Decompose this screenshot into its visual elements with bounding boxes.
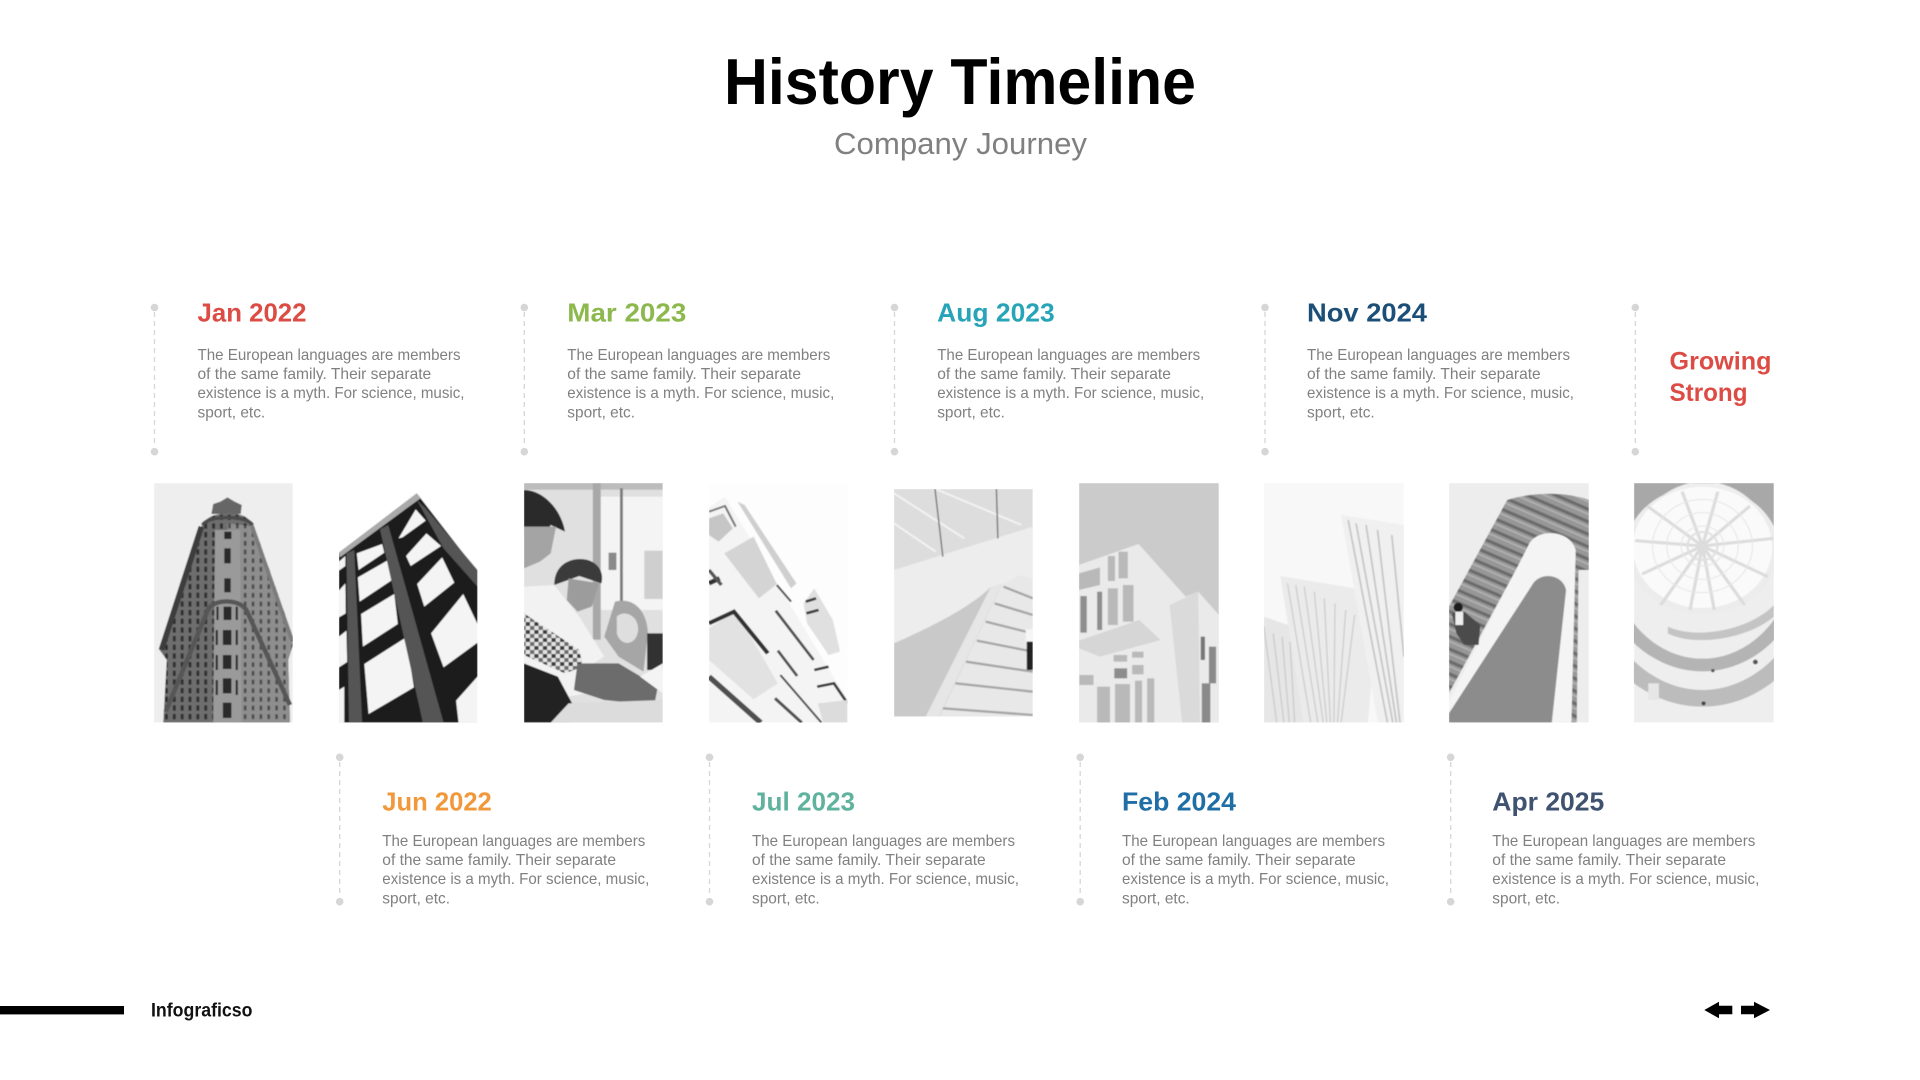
milestone: Jun 2022: sport, etc. bbox=[382, 890, 450, 907]
milestone: Feb 2024: The European languages are members bbox=[1122, 833, 1385, 850]
milestone: Jan 2022: existence is a myth. For science, music, bbox=[198, 385, 464, 402]
milestone: Nov 2024: The European languages are members bbox=[1307, 347, 1570, 364]
milestone: Aug 2023: Aug 2023 bbox=[937, 298, 1055, 328]
milestone: Aug 2023: existence is a myth. For science, music, bbox=[937, 385, 1204, 402]
footer bar bbox=[0, 1006, 124, 1014]
milestone: Jan 2022: The European languages are members bbox=[198, 347, 460, 364]
photo: spiral ramp bbox=[1449, 483, 1589, 723]
milestone: Growing Strong bbox=[1632, 304, 1772, 456]
milestone: Feb 2024: sport, etc. bbox=[1122, 890, 1190, 907]
milestone: Aug 2023: of the same family. Their separate bbox=[937, 366, 1171, 383]
milestone: Aug 2023 bbox=[891, 298, 1204, 456]
milestone: Feb 2024: of the same family. Their separate bbox=[1122, 852, 1356, 869]
milestone: Aug 2023: The European languages are members bbox=[937, 347, 1200, 364]
milestone: Apr 2025: Apr 2025 bbox=[1492, 787, 1604, 817]
milestone: Growing Strong: Growing bbox=[1670, 348, 1772, 376]
photo: white balconies bbox=[709, 483, 847, 723]
icon: previous arrow bbox=[1704, 1002, 1732, 1018]
milestone: Jan 2022: of the same family. Their separate bbox=[198, 366, 431, 383]
milestone: Nov 2024: of the same family. Their separate bbox=[1307, 366, 1541, 383]
subtitle: Company Journey bbox=[834, 126, 1087, 161]
photo: team at work bbox=[524, 483, 663, 723]
milestone: Nov 2024 bbox=[1261, 298, 1574, 456]
milestone: Jul 2023: Jul 2023 bbox=[752, 787, 855, 817]
milestone: Mar 2023: The European languages are members bbox=[567, 347, 830, 364]
milestone: Nov 2024: sport, etc. bbox=[1307, 404, 1375, 421]
milestone: Jan 2022: Jan 2022 bbox=[198, 298, 306, 328]
milestone: Jun 2022: existence is a myth. For science, music, bbox=[382, 871, 649, 888]
footer brand: Infograficso bbox=[151, 1001, 252, 1022]
milestone: Mar 2023: of the same family. Their separate bbox=[567, 366, 801, 383]
milestone: Mar 2023 bbox=[520, 298, 834, 456]
milestone: Jul 2023: of the same family. Their separate bbox=[752, 852, 986, 869]
photo: rotunda dome bbox=[1634, 483, 1774, 722]
milestone: Jun 2022 bbox=[336, 754, 649, 907]
milestone: Nov 2024: existence is a myth. For science, music, bbox=[1307, 385, 1574, 402]
milestone: Feb 2024: existence is a myth. For science, music, bbox=[1122, 871, 1389, 888]
milestone: Nov 2024: Nov 2024 bbox=[1307, 298, 1428, 328]
milestone: Jun 2022: of the same family. Their separate bbox=[382, 852, 616, 869]
milestone: Jan 2022 bbox=[151, 298, 464, 456]
milestone: Feb 2024 bbox=[1076, 754, 1389, 907]
milestone: Apr 2025 bbox=[1447, 754, 1759, 907]
milestone: Jan 2022: sport, etc. bbox=[198, 404, 265, 421]
photo: white ribbed fins bbox=[1264, 514, 1404, 722]
milestone: Mar 2023: existence is a myth. For science, music, bbox=[567, 385, 834, 402]
photo: white staircase bbox=[894, 489, 1033, 717]
milestone: Mar 2023: Mar 2023 bbox=[567, 298, 686, 328]
milestone: Jul 2023: The European languages are members bbox=[752, 833, 1015, 850]
milestone: Jul 2023: sport, etc. bbox=[752, 890, 820, 907]
milestone: Apr 2025: The European languages are members bbox=[1492, 833, 1755, 850]
milestone: Mar 2023: sport, etc. bbox=[567, 404, 635, 421]
photo: modern block building bbox=[1079, 483, 1219, 723]
milestone: Jun 2022: The European languages are members bbox=[382, 833, 645, 850]
milestone: Aug 2023: sport, etc. bbox=[937, 404, 1005, 421]
milestone: Jul 2023 bbox=[706, 754, 1019, 907]
milestone: Feb 2024: Feb 2024 bbox=[1122, 787, 1237, 817]
milestone: Apr 2025: sport, etc. bbox=[1492, 890, 1560, 907]
milestone: Jul 2023: existence is a myth. For science, music, bbox=[752, 871, 1019, 888]
milestone: Growing Strong: Strong bbox=[1670, 379, 1748, 407]
icon: next arrow bbox=[1741, 1002, 1770, 1018]
milestone: Apr 2025: existence is a myth. For science, music, bbox=[1492, 871, 1759, 888]
photo: dark glass facade bbox=[339, 483, 477, 723]
photo: flatiron building bbox=[154, 483, 293, 723]
milestone: Jun 2022: Jun 2022 bbox=[382, 787, 492, 817]
title: History Timeline bbox=[724, 45, 1196, 118]
milestone: Apr 2025: of the same family. Their separate bbox=[1492, 852, 1726, 869]
